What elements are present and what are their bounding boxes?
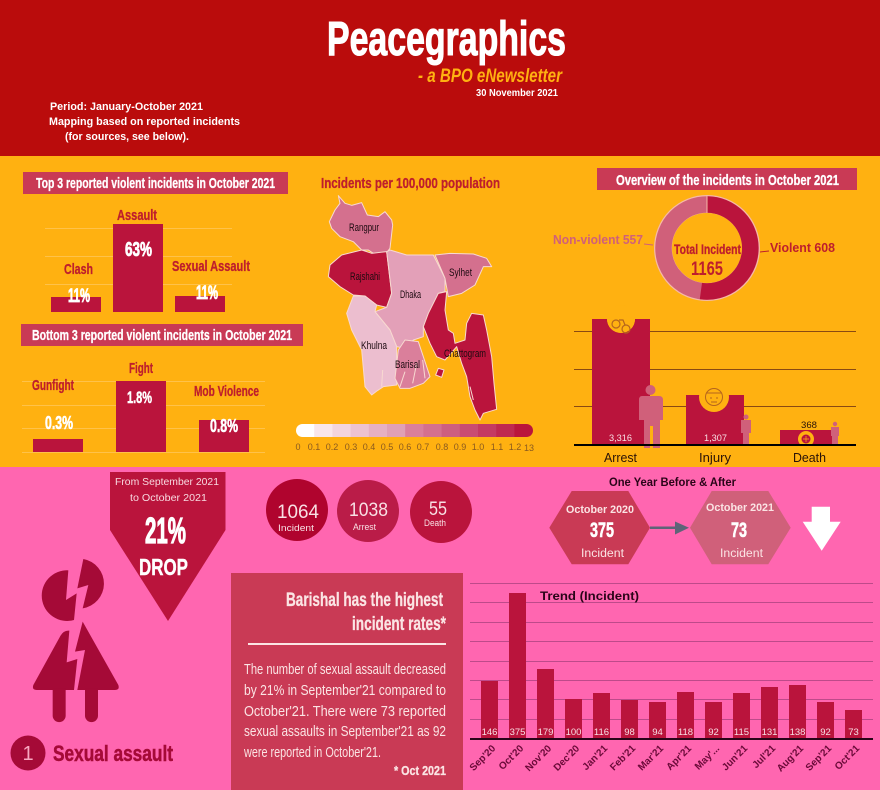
heading: sexual assault: 1 xyxy=(22,743,34,765)
period note xyxy=(49,101,240,143)
bar: arrest: Arrest xyxy=(604,450,637,465)
panel: Barishal text: incident rates* xyxy=(352,614,446,635)
bar values: 92 xyxy=(820,727,831,738)
month labels: Dec'20 xyxy=(552,743,582,774)
bar: clash xyxy=(51,261,101,312)
body text xyxy=(243,661,446,761)
map labels: Dhaka xyxy=(400,289,422,301)
month labels: Sep'20 xyxy=(468,743,498,774)
icon: arrest person xyxy=(639,385,663,448)
stat: death: 55 xyxy=(429,499,447,520)
donut chart: Non-violent 557 xyxy=(553,232,643,247)
bar: injury xyxy=(686,382,744,465)
panel: Barishal text: * Oct 2021 xyxy=(394,763,446,778)
panel: incidents map xyxy=(295,175,534,453)
donut chart: Violent 608 xyxy=(770,240,835,255)
bar: gunfight: 0.3% xyxy=(45,413,73,433)
month labels xyxy=(468,743,862,774)
bar: gunfight: Gunfight xyxy=(32,377,74,394)
bar values: 94 xyxy=(652,727,663,738)
panel: October 2021 overview background xyxy=(0,156,880,467)
bar values: 375 xyxy=(510,727,525,738)
panel: Barishal text xyxy=(231,573,463,790)
bar values: 115 xyxy=(734,727,749,738)
bar: injury: Injury xyxy=(699,450,731,465)
colour scale legend: 1.0 xyxy=(472,442,484,452)
month labels: Oct'20 xyxy=(497,743,526,772)
donut chart xyxy=(553,196,835,292)
date: 30 November 2021 xyxy=(476,88,558,99)
map heading: Incidents per 100,000 population xyxy=(321,175,500,192)
body text: The number of sexual assault decreased xyxy=(244,661,446,678)
bar values: 179 xyxy=(538,727,553,738)
colour scale legend xyxy=(295,424,534,453)
colour scale legend: 0.2 xyxy=(326,442,338,452)
map labels xyxy=(349,222,486,371)
month labels: Aug'21 xyxy=(775,743,806,774)
colour scale legend: 0.8 xyxy=(436,442,448,452)
panel: top 3 violent incidents: Top 3 reported violent incidents in October 2021 xyxy=(36,175,275,192)
colour scale legend: 0.6 xyxy=(399,442,411,452)
bar: mob violence: Mob Violence xyxy=(194,383,259,400)
colour scale legend: 13 xyxy=(524,443,534,453)
bar values: 73 xyxy=(848,727,859,738)
panel: one year before and after xyxy=(549,475,841,564)
month labels: Jan'21 xyxy=(581,743,610,773)
bar: clash: Clash xyxy=(64,261,93,278)
icon: down arrow xyxy=(803,507,841,551)
map labels: Chattogram xyxy=(444,348,486,360)
icon: broken woman figure xyxy=(33,559,119,722)
map labels: Rangpur xyxy=(349,222,379,234)
bar: mob violence xyxy=(194,383,259,452)
heading: sexual assault xyxy=(10,736,174,770)
colour scale legend: 0.3 xyxy=(345,442,357,452)
colour scale legend: 0.5 xyxy=(381,442,393,452)
month labels: Sep'21 xyxy=(804,743,834,774)
hexagon: October 2020 xyxy=(549,491,650,564)
stat: incident: Incident xyxy=(278,523,315,533)
bar: death xyxy=(780,420,834,465)
stat: death xyxy=(410,481,472,543)
bar values: 131 xyxy=(762,727,777,738)
colour scale legend: 0.9 xyxy=(454,442,466,452)
month labels: Apr'21 xyxy=(665,743,694,773)
bar: sexual assault: Sexual Assault xyxy=(172,258,250,275)
stat: arrest xyxy=(337,480,399,542)
bar: injury: 1,307 xyxy=(704,433,727,444)
bar: death: 368 xyxy=(801,420,817,431)
bar: clash: 11% xyxy=(68,286,90,307)
stat: incident xyxy=(266,479,328,541)
panel: bottom 3 violent incidents xyxy=(21,324,303,452)
icon: injury person xyxy=(741,414,751,446)
bar: assault: 63% xyxy=(125,239,152,261)
colour scale legend: 1.2 xyxy=(509,442,521,452)
donut chart: Total Incident xyxy=(674,241,741,257)
heading: sexual assault: Sexual assault xyxy=(53,741,174,766)
colour scale legend: 0.1 xyxy=(308,442,320,452)
bar values: 118 xyxy=(678,727,693,738)
bar: gunfight xyxy=(32,377,83,452)
bar: fight xyxy=(116,360,166,452)
bar: mob violence: 0.8% xyxy=(210,416,238,436)
hexagon: October 2021: 73 xyxy=(731,519,747,542)
panel: arrest, injury and death chart xyxy=(574,305,856,465)
month labels: Jun'21 xyxy=(720,743,750,773)
bar: arrest: 3,316 xyxy=(609,433,632,444)
bar values: 100 xyxy=(566,727,581,738)
panel: Barishal text: Barishal has the highest xyxy=(286,590,443,611)
panel: bottom 3 violent incidents: Bottom 3 reported violent incidents in October 2021 xyxy=(32,327,292,344)
body text: were reported in October'21. xyxy=(243,744,381,761)
bars xyxy=(481,593,862,738)
hexagon: October 2021 xyxy=(690,491,791,564)
panel: top 3 violent incidents xyxy=(23,172,288,312)
bar: arrest xyxy=(592,305,650,465)
period note: Mapping based on reported incidents xyxy=(49,116,240,128)
map labels: Khulna xyxy=(361,340,388,352)
map labels: Barisal xyxy=(395,359,420,371)
callout: 21% drop: 21% xyxy=(145,510,186,551)
panel: overview of incidents xyxy=(553,168,857,292)
month labels: Mar'21 xyxy=(636,743,666,773)
body text: October'21. There were 73 reported xyxy=(244,703,446,720)
stat: death: Death xyxy=(424,518,446,528)
panel: one year before and after: One Year Before & After xyxy=(609,475,736,489)
month labels: Nov'20 xyxy=(523,743,554,774)
colour scale legend: 0 xyxy=(295,442,301,452)
stat: incident: 1064 xyxy=(277,502,319,523)
choropleth map of Bangladesh xyxy=(328,196,497,420)
hexagon: October 2021: Incident xyxy=(720,548,764,560)
bar: assault: Assault xyxy=(117,207,157,224)
panel: header band xyxy=(0,0,880,156)
map labels: Rajshahi xyxy=(350,271,380,283)
bar values: 92 xyxy=(708,727,719,738)
bar: death: Death xyxy=(793,450,826,465)
icon: death person xyxy=(831,422,839,445)
body text: by 21% in September'21 compared to xyxy=(244,682,446,699)
panel: sexual assault background xyxy=(0,467,880,790)
month labels: Jul'21 xyxy=(751,743,778,771)
hexagon: October 2021: October 2021 xyxy=(706,502,774,514)
callout: 21% drop: From September 2021 xyxy=(115,476,219,488)
arrow: before to after xyxy=(650,522,689,534)
map labels: Sylhet xyxy=(449,267,472,279)
hexagon: October 2020: October 2020 xyxy=(566,504,634,516)
bar values: 98 xyxy=(624,727,635,738)
bar: sexual assault xyxy=(172,258,250,312)
colour scale legend: 0.7 xyxy=(417,442,429,452)
period note: Period: January-October 2021 xyxy=(50,101,203,113)
month labels: Oct'21 xyxy=(833,743,862,772)
bar: fight: Fight xyxy=(129,360,153,377)
hexagon: October 2020: Incident xyxy=(581,548,625,560)
icon: death mark xyxy=(802,434,810,444)
chart title: Trend (Incident) xyxy=(540,589,639,603)
donut chart: 1165 xyxy=(691,259,723,280)
colour scale legend: 0.4 xyxy=(363,442,375,452)
bar: sexual assault: 11% xyxy=(196,283,218,304)
subtitle: - a BPO eNewsletter xyxy=(418,66,563,87)
bar values: 116 xyxy=(594,727,609,738)
bar values xyxy=(482,727,859,738)
stat: arrest: 1038 xyxy=(349,500,388,521)
title: Peacegraphics xyxy=(327,13,566,66)
period note: (for sources, see below). xyxy=(65,131,189,143)
bar values: 138 xyxy=(790,727,805,738)
month labels: Feb'21 xyxy=(608,743,638,773)
callout: 21% drop: to October 2021 xyxy=(130,492,207,504)
chart: trend of incidents xyxy=(468,584,873,774)
icon: injured face xyxy=(706,388,722,406)
bar: fight: 1.8% xyxy=(127,388,152,407)
bar values: 146 xyxy=(482,727,497,738)
body text: sexual assaults in September'21 as 92 xyxy=(244,723,446,740)
axis baseline xyxy=(574,444,856,446)
icon: handcuffs xyxy=(612,320,630,333)
hexagon: October 2020: 375 xyxy=(590,519,614,542)
axis line xyxy=(470,738,873,740)
bar: assault xyxy=(113,207,163,312)
colour scale legend: 1.1 xyxy=(491,442,503,452)
stat: arrest: Arrest xyxy=(353,522,376,532)
month labels: May'... xyxy=(693,743,722,772)
callout: 21% drop: DROP xyxy=(139,554,188,580)
callout: 21% drop xyxy=(110,472,226,621)
